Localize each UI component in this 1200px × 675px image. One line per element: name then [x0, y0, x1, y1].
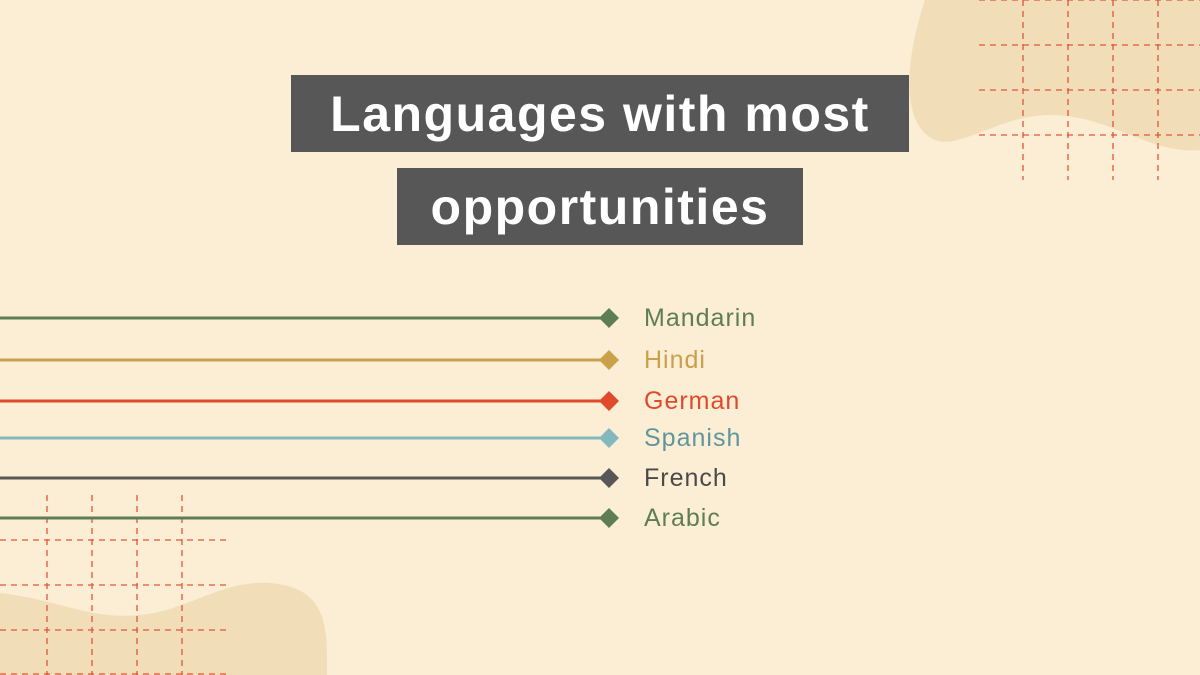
title line 1: Languages with most: [330, 86, 870, 142]
title line 2: opportunities: [431, 178, 769, 234]
label: German: German: [644, 387, 740, 415]
label: French: French: [644, 464, 728, 492]
title line 2: [397, 168, 803, 245]
label: Spanish: Spanish: [644, 424, 741, 452]
label: Hindi: Hindi: [644, 346, 706, 374]
label: Arabic: Arabic: [644, 504, 721, 532]
title line 1: [291, 75, 909, 152]
label: Mandarin: Mandarin: [644, 304, 756, 332]
chart: language lines: [0, 308, 619, 528]
